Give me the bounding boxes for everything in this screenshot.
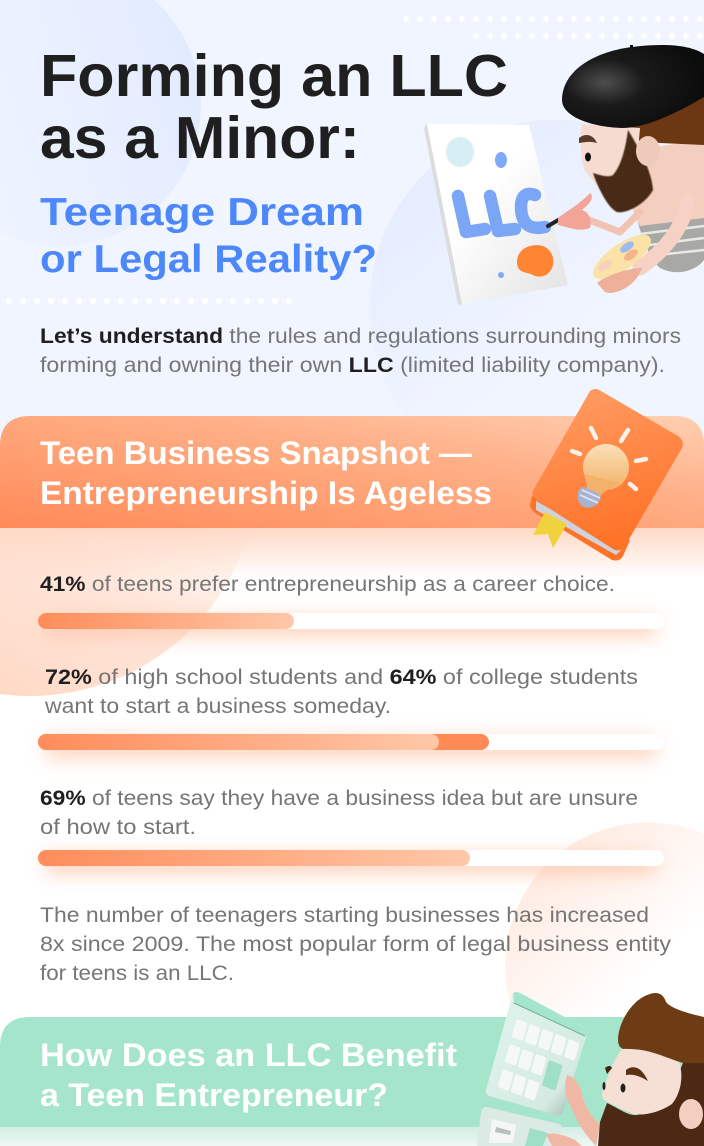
artist beard [593,130,653,212]
light rays [572,428,646,489]
benefits heading: a Teen Entrepreneur? [40,1077,388,1113]
closing paragraph: 8x since 2009. The most popular form of legal business entity [40,933,672,956]
blue header background [0,0,704,500]
keys [498,1019,580,1111]
lightbulb [578,444,629,508]
stat 69% [38,787,664,874]
artist body [584,140,704,272]
artist palette [587,200,688,293]
artist hand and brush [548,193,592,230]
panel: teen business snapshot heading band [0,416,704,528]
intro text [40,325,681,377]
benefits heading: How Does an LLC Benefit [40,1037,457,1073]
stat 41%: 41% of teens prefer entrepreneurship as a career choice. [40,573,615,596]
dot row: left [6,298,292,304]
man's hair [618,993,704,1063]
artist beret [562,45,704,128]
intro text: Let’s understand the rules and regulations surrounding minors [40,325,681,348]
snapshot heading: Teen Business Snapshot — [40,435,472,471]
canvas [424,124,568,305]
snapshot heading: Entrepreneurship Is Ageless [40,475,492,511]
title: as a Minor: [40,105,360,171]
artist face [581,124,640,190]
bookmark [533,512,567,548]
artist ear [636,136,660,166]
closing paragraph: The number of teenagers starting businesses has increased [40,904,649,927]
illustration: artist painting LLC [424,45,704,305]
stat 69%: of how to start. [40,816,196,839]
subtitle: Teenage Dream [40,191,364,234]
book cover [532,389,683,550]
title [40,43,508,171]
artist hair [628,97,704,145]
stat 72% and 64% [38,666,664,758]
closing paragraph [40,904,672,985]
subtitle: or Legal Reality? [40,238,377,281]
subtitle [40,191,377,281]
icon: book with lightbulb [530,389,683,560]
man's beard [598,1063,704,1146]
panel: benefits heading band [0,1017,704,1127]
benefits heading [40,1037,457,1113]
decorative circle: behind artist [370,120,704,416]
decorative circle: peach right [505,823,704,1020]
stat 72% and 64%: 72% of high school students and 64% of college students [45,666,638,689]
lower keypad [477,1107,562,1146]
snapshot heading [40,435,492,511]
progress bar 41% [38,613,664,637]
progress bar 72% and 64% [38,734,664,758]
progress bar 69% [38,850,664,874]
closing paragraph: for teens is an LLC. [40,962,234,985]
man's eyes, brow and ear [602,1066,703,1129]
decorative circle: top left [0,0,201,246]
stat 72% and 64%: want to start a business someday. [44,695,391,718]
artist eye and brow [579,135,597,162]
keypad panel [486,992,587,1115]
illustration: man using keypad [477,992,704,1146]
man's face [602,1049,681,1115]
dot rows: top right [403,16,703,39]
stat 41% [38,573,664,637]
decorative circle: peach left [0,528,250,696]
section fade: benefits [0,1127,704,1146]
man's arm and hands [546,1075,600,1146]
intro text: forming and owning their own LLC (limited liability company). [40,354,665,377]
title: Forming an LLC [40,43,508,109]
stat 69%: 69% of teens say they have a business idea but are unsure [40,787,638,810]
section fade: snapshot [0,528,704,578]
